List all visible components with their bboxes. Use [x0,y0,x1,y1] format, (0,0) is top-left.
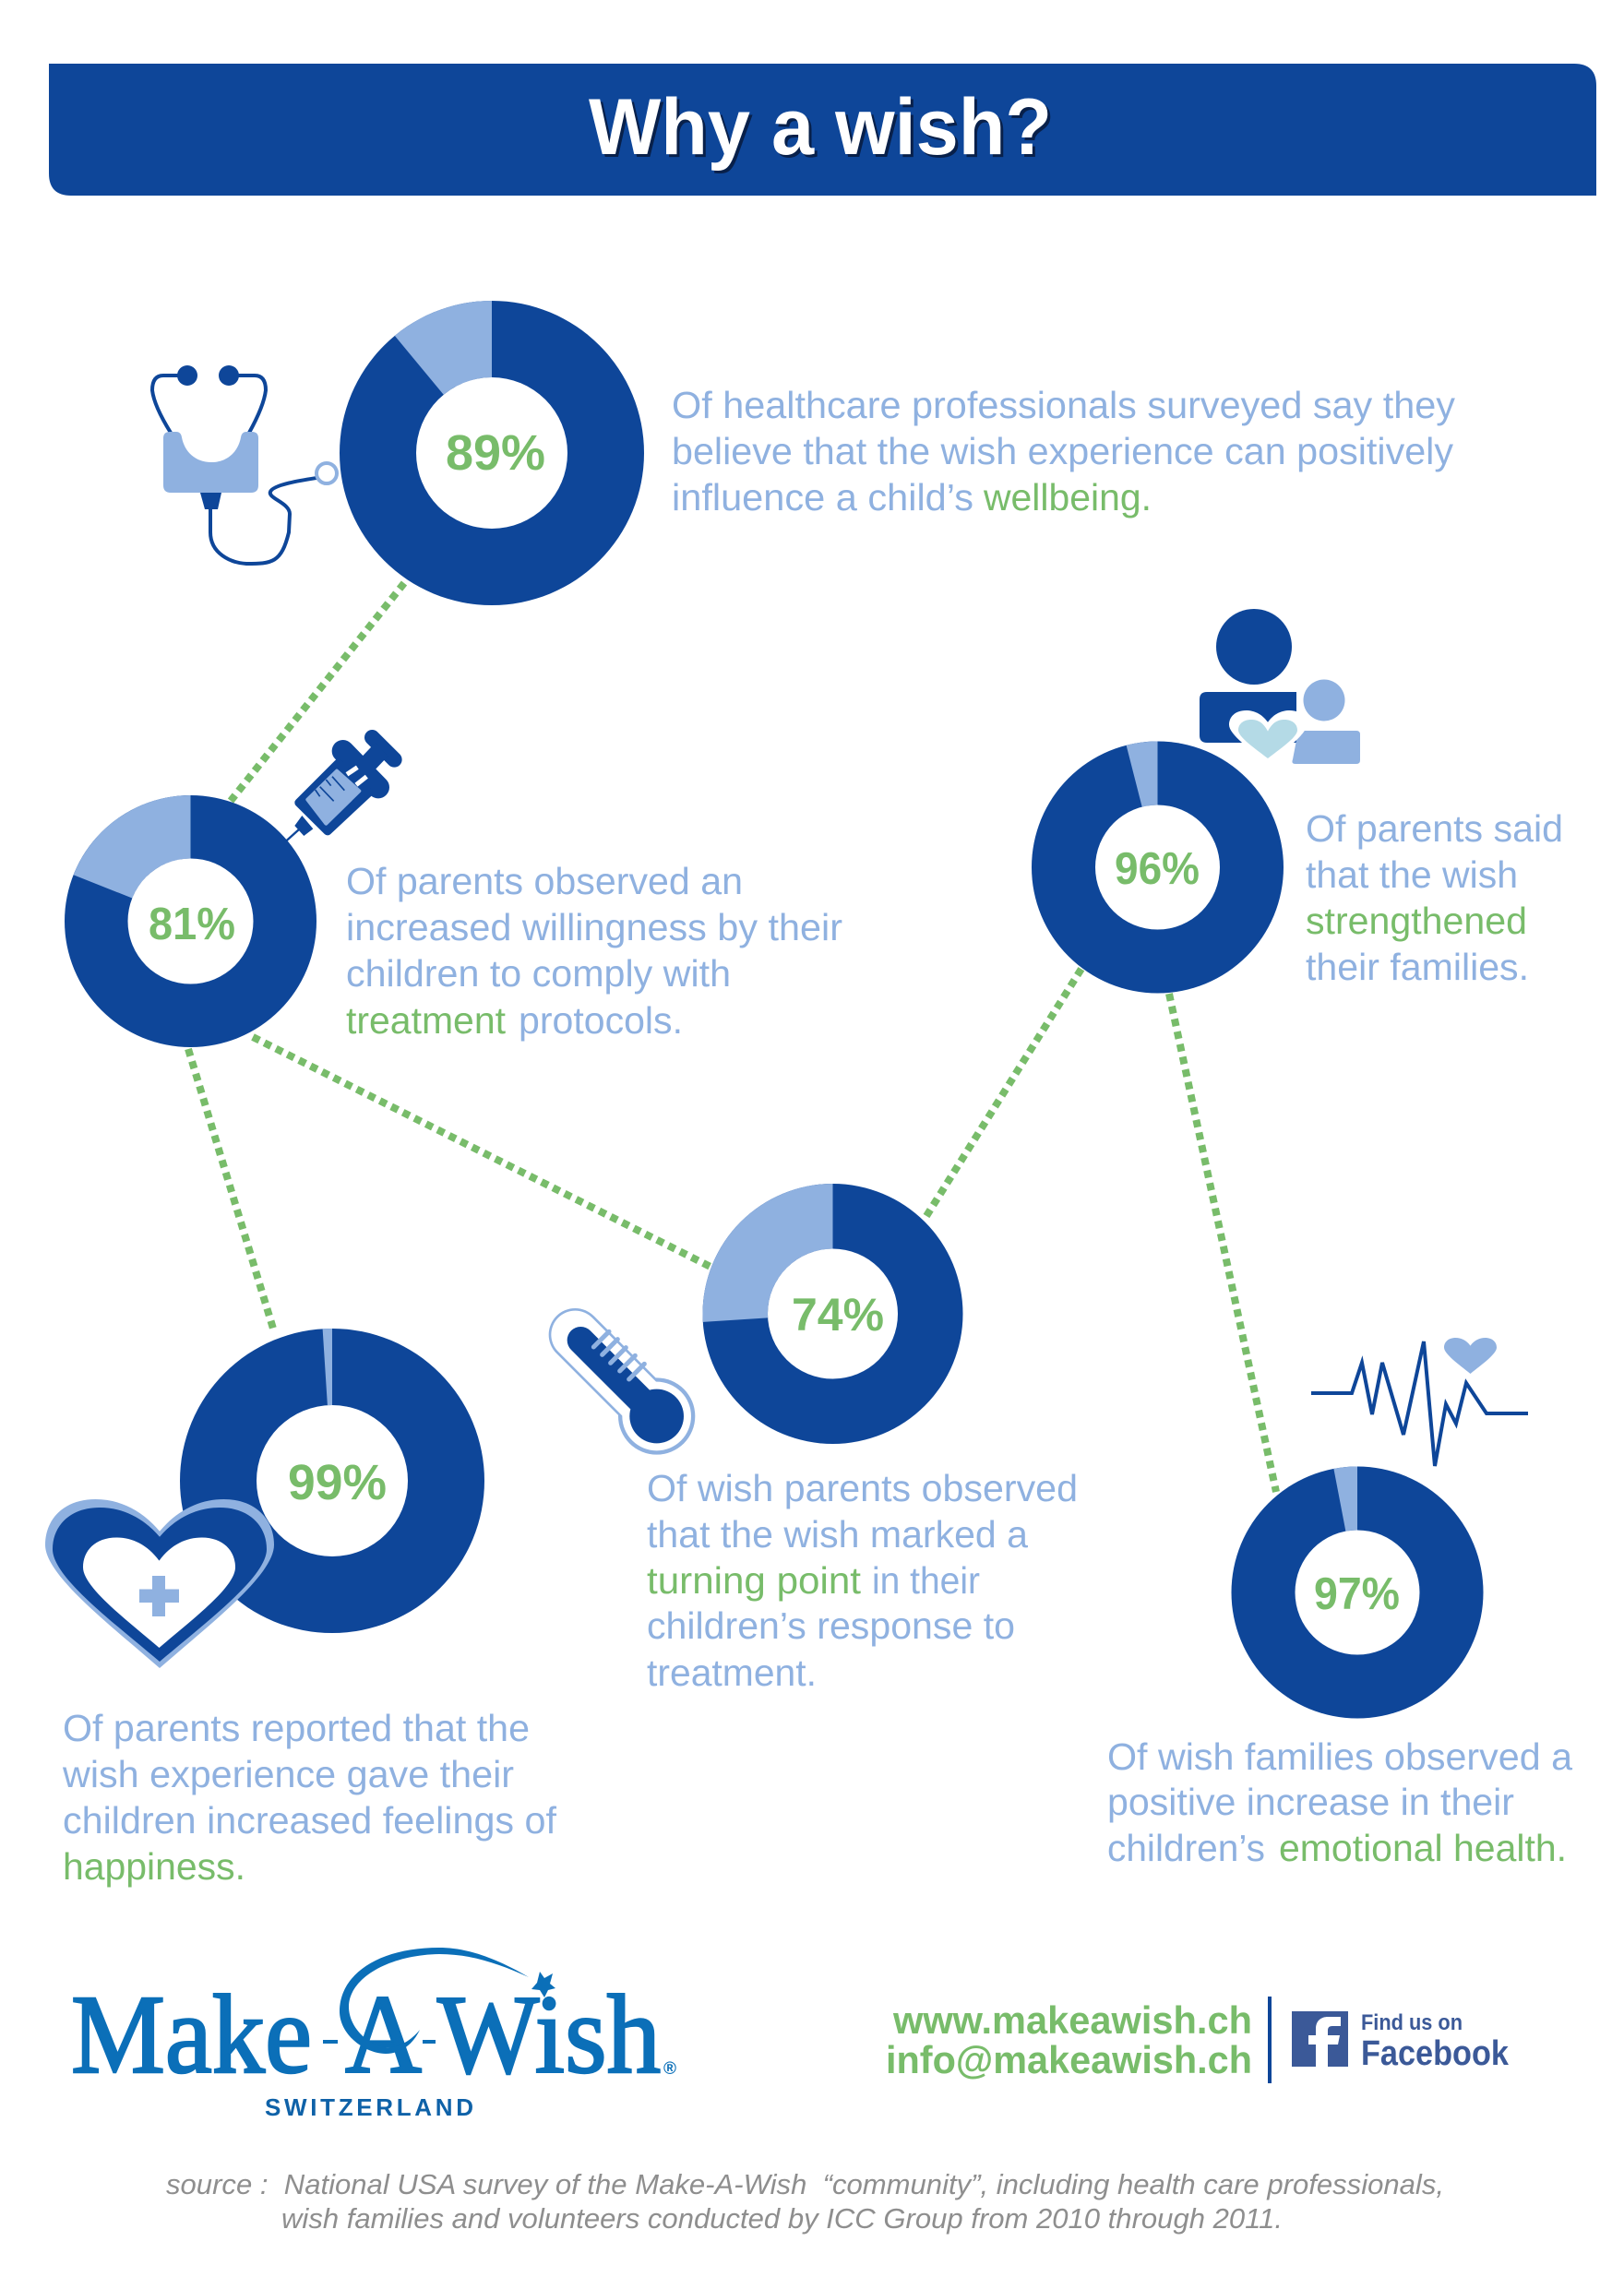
text: treatment protocols: children to comply with [346,952,731,995]
panel: 99% happiness [45,1329,557,1888]
icon: parent and child with heart [1200,609,1360,764]
text: strengthened families: strengthened [1306,900,1527,942]
panel: 97% emotional health [1107,1338,1572,1869]
donut chart 74% [703,1184,963,1444]
text: healthcare professionals: believe that the wish experience can positively [672,430,1453,472]
text: turning point: turning point [647,1559,862,1602]
icon: syringe [286,737,394,841]
text: happiness: Of parents reported that the [63,1707,530,1749]
contact details: info@makeawish.ch [886,2038,1252,2081]
donut chart 99% [180,1329,484,1633]
logo: Make-A-Wish Switzerland: SWITZERLAND [265,2093,473,2121]
donut chart 96%: 96% [1115,844,1200,894]
donut chart 97% [1231,1467,1484,1718]
icon: stethoscope [152,365,337,564]
source note [166,2168,1444,2235]
title banner [49,64,1596,196]
text: turning point: children’s response to [647,1604,1015,1647]
icon: thermometer [575,1331,695,1455]
facebook badge [1292,2010,1510,2073]
text: healthcare professionals: Of healthcare professionals surveyed say they [672,384,1455,426]
donut chart 89% [340,301,644,605]
title: Why a wish? [589,83,1052,172]
text: happiness [62,1707,557,1888]
text: emotional health [1107,1735,1572,1869]
text: healthcare professionals [672,384,1455,519]
donut chart 81%: 81% [149,900,235,949]
text: emotional health: children’s [1107,1827,1265,1869]
facebook badge: Find us on [1361,2010,1463,2035]
panel: 89% healthcare professionals [152,301,1455,605]
text: treatment protocols: protocols. [519,999,683,1042]
icon: heart with cross [45,1499,274,1668]
icon: small heart [1444,1338,1497,1374]
text: strengthened families: Of parents said [1306,807,1563,850]
dotted connector lines [188,583,1276,1492]
logo: Make-A-Wish Switzerland: ® [663,2059,676,2079]
donut chart 99%: 99% [288,1455,387,1510]
panel: 81% treatment protocols [65,737,842,1047]
divider [1268,1997,1272,2083]
logo: Make-A-Wish Switzerland: A [345,1973,422,2097]
text: strengthened families: their families. [1306,946,1529,988]
logo: Make-A-Wish Switzerland: Make [71,1973,312,2097]
facebook badge: Facebook [1361,2034,1510,2073]
text: happiness: wish experience gave their [62,1753,514,1795]
text: treatment protocols [346,860,842,1042]
donut chart 74%: 74% [792,1289,884,1341]
contact details [886,1998,1252,2081]
donut chart 89%: 89% [446,425,545,481]
source note: source : National USA survey of the Make-A-Wish “community”, including health care professionals, [166,2168,1444,2200]
text: strengthened families: that the wish [1306,853,1518,896]
text: happiness: children increased feelings of [63,1799,557,1842]
panel: 74% turning point [575,1184,1078,1694]
text: happiness: happiness. [63,1845,245,1888]
icon: heartbeat line [1311,1341,1528,1466]
text: strengthened families [1306,807,1563,988]
logo: Make-A-Wish Switzerland [71,1948,676,2121]
contact details: www.makeawish.ch [892,1998,1252,2042]
source note: wish families and volunteers conducted by ICC Group from 2010 through 2011. [281,2202,1283,2235]
text: turning point: that the wish marked a [647,1513,1028,1556]
text: treatment protocols: Of parents observed an [346,860,743,902]
text: emotional health: positive increase in their [1107,1781,1514,1823]
text: healthcare professionals: wellbeing. [983,476,1152,519]
text: emotional health: Of wish families observed a [1107,1735,1572,1778]
text: emotional health: emotional health. [1279,1827,1567,1869]
panel: 96% strengthened families [1032,609,1563,993]
text: healthcare professionals: influence a child’s [672,476,973,519]
text: turning point [647,1467,1078,1694]
donut chart 97%: 97% [1314,1569,1400,1619]
donut chart 81% [65,795,316,1047]
text: treatment protocols: treatment [346,999,507,1042]
text: turning point: in their [872,1559,980,1602]
text: turning point: Of wish parents observed [647,1467,1078,1509]
text: treatment protocols: increased willingness by their [346,906,842,948]
logo: Make-A-Wish Switzerland: Wish [437,1973,661,2097]
text: turning point: treatment. [647,1651,817,1694]
donut chart 96% [1032,742,1284,993]
